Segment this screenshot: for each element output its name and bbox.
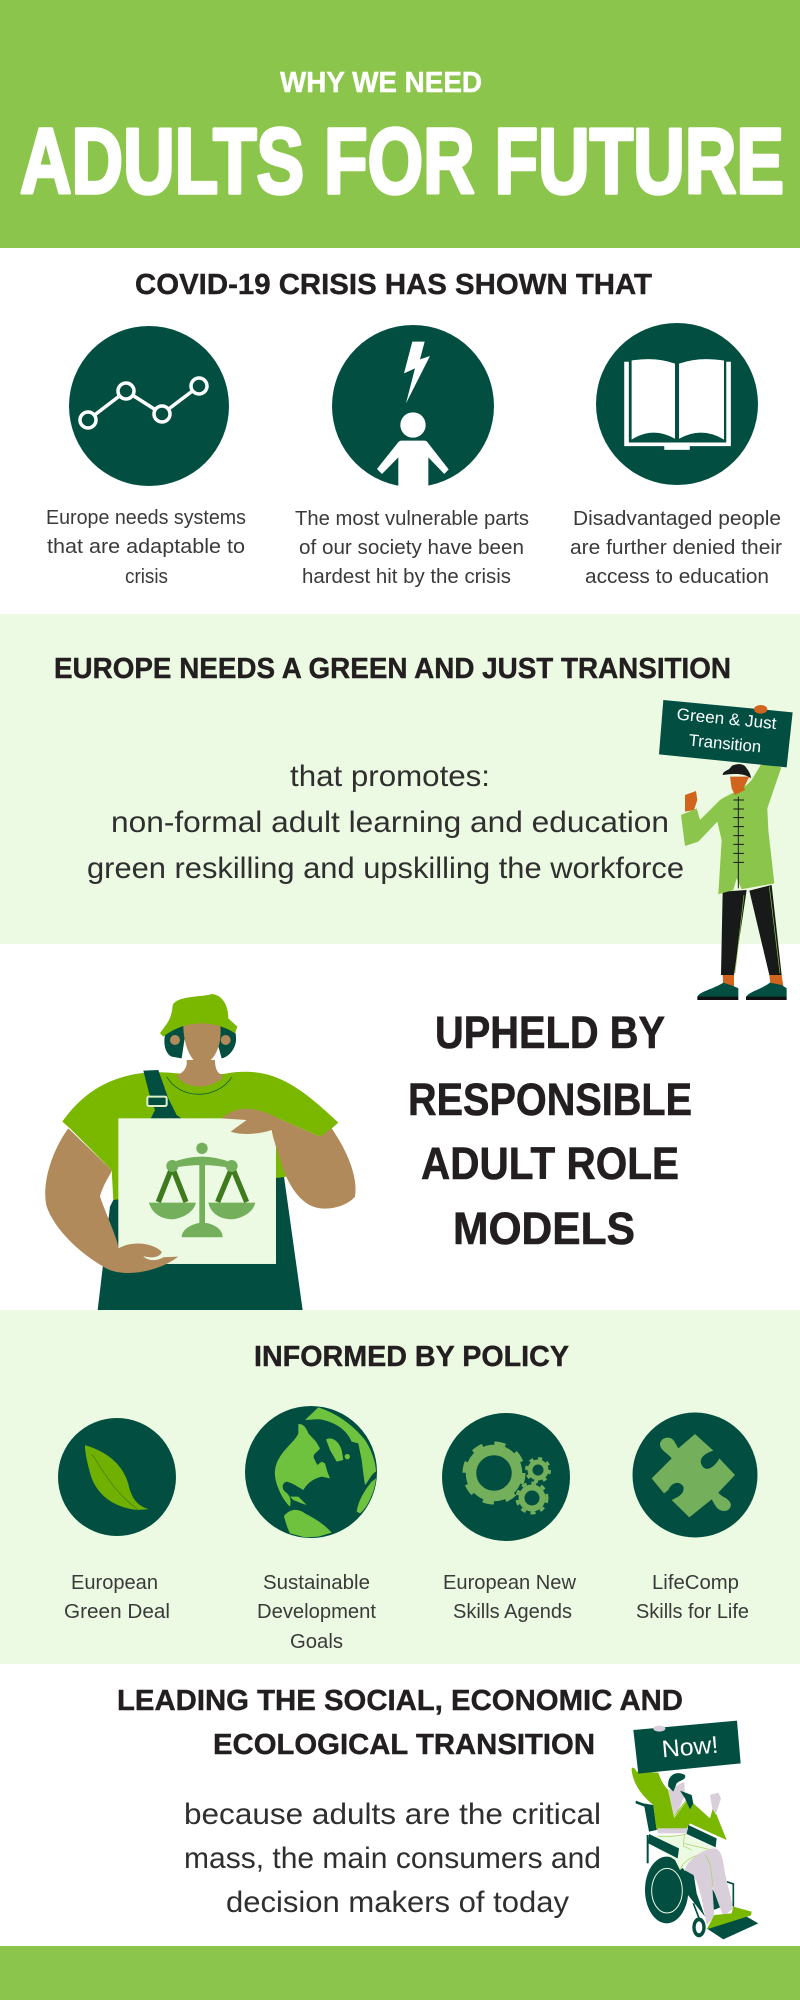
caption: vulnerable parts: The most vulnerable parts (295, 507, 529, 530)
footer band (0, 1946, 800, 2000)
text: that promotes: that promotes: (290, 760, 490, 793)
panel: role models (0, 944, 800, 1310)
icon: leaf (58, 1418, 176, 1536)
text: critical mass (184, 1798, 601, 1919)
caption: European Green Deal: Green Deal (64, 1600, 170, 1623)
illustration: man holding green and just transition sign (659, 700, 793, 1000)
panel: leading the transition (0, 1664, 800, 1946)
heading: leading transition: LEADING THE SOCIAL, ECONOMIC AND (117, 1685, 683, 1717)
panel: title header (0, 0, 800, 248)
caption: LifeComp (636, 1571, 749, 1623)
caption: disadvantaged people: are further denied their (570, 536, 782, 559)
heading: upheld by role models: MODELS (453, 1203, 635, 1254)
icon: open book (596, 323, 758, 485)
heading: policy: INFORMED BY POLICY (254, 1341, 569, 1373)
heading: upheld by role models (408, 1007, 692, 1254)
caption: European New Skills Agends (443, 1571, 576, 1623)
icon: person struck by lightning (332, 325, 494, 488)
illustration: adult holding scales card (45, 994, 356, 1310)
icon: gears (442, 1413, 570, 1541)
caption: adaptable systems: crisis (125, 565, 168, 588)
title kicker: WHY WE NEED (280, 67, 482, 99)
caption: adaptable systems (46, 506, 246, 588)
text: critical mass: decision makers of today (226, 1886, 569, 1919)
caption: adaptable systems: Europe needs systems (46, 506, 246, 529)
illustration: wheelchair user with sign: Now! (661, 1732, 719, 1763)
icon: puzzle piece (632, 1412, 758, 1538)
caption: Sustainable Development Goals: Development (257, 1600, 376, 1623)
panel: informed by policy (0, 1310, 800, 1664)
illustration: wheelchair user with sign (632, 1721, 758, 1939)
text: that promotes: green reskilling and upskilling the workforce (87, 852, 684, 885)
caption: disadvantaged people (570, 507, 782, 588)
caption: Sustainable Development Goals: Goals (290, 1630, 343, 1653)
caption: European Green Deal (64, 1571, 170, 1623)
text: that promotes: non-formal adult learning and education (111, 806, 669, 839)
heading: upheld by role models: UPHELD BY (435, 1007, 665, 1058)
caption: vulnerable parts: of our society have been (299, 536, 524, 559)
sign text: Green & Just (676, 705, 778, 733)
panel: covid crisis (0, 248, 800, 614)
heading: leading transition: ECOLOGICAL TRANSITION (213, 1729, 595, 1761)
icon: line chart (69, 326, 229, 486)
caption: vulnerable parts: hardest hit by the crisis (302, 565, 511, 588)
caption: LifeComp: Skills for Life (636, 1600, 749, 1623)
caption: disadvantaged people: Disadvantaged people (573, 507, 781, 530)
sign text: Transition (688, 731, 762, 756)
text: critical mass: because adults are the critical (184, 1798, 601, 1831)
caption: adaptable systems: that are adaptable to (47, 535, 245, 558)
caption: European New Skills Agends: Skills Agends (453, 1600, 572, 1623)
caption: Sustainable Development Goals: Sustainable (263, 1571, 370, 1594)
heading: leading transition (117, 1685, 683, 1761)
heading: covid: COVID-19 CRISIS HAS SHOWN THAT (135, 269, 652, 301)
caption: disadvantaged people: access to education (585, 565, 769, 588)
heading: green transition: EUROPE NEEDS A GREEN AND JUST TRANSITION (54, 653, 731, 685)
caption: vulnerable parts (295, 507, 529, 588)
text: critical mass: mass, the main consumers and (184, 1842, 601, 1875)
panel: green and just transition (0, 614, 800, 944)
heading: upheld by role models: ADULT ROLE (421, 1138, 679, 1189)
sign text (676, 705, 778, 756)
caption: European New Skills Agends: European New (443, 1571, 576, 1594)
caption: LifeComp: LifeComp (652, 1571, 739, 1594)
heading: upheld by role models: RESPONSIBLE (408, 1074, 692, 1125)
icon: globe (245, 1406, 377, 1538)
caption: Sustainable Development Goals (257, 1571, 376, 1653)
caption: European Green Deal: European (71, 1571, 158, 1594)
text: that promotes (87, 760, 684, 885)
